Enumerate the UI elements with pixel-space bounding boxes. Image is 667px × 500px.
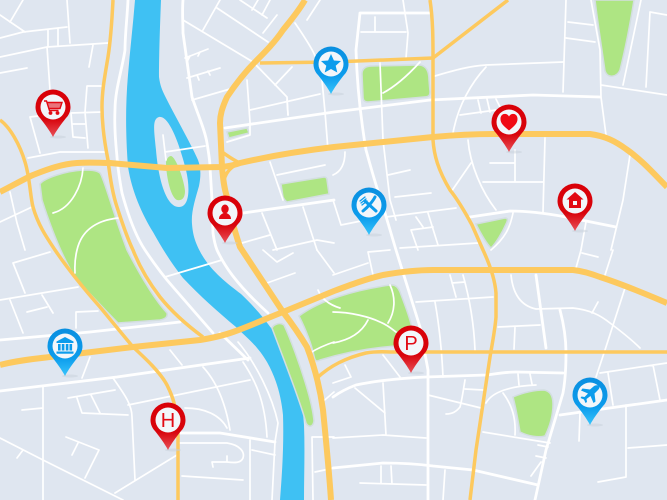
icon: heart <box>500 114 518 130</box>
river <box>126 0 304 500</box>
icon: person <box>219 204 231 219</box>
road: main 1 <box>0 134 667 192</box>
river island <box>154 117 188 207</box>
pin: person <box>208 196 242 244</box>
icon: fork and knife <box>360 197 376 211</box>
pin: hospital <box>150 402 186 452</box>
park: small strip <box>227 128 249 138</box>
road: western arterial <box>102 0 203 337</box>
icon: H: H <box>161 410 175 432</box>
icon: P: P <box>404 333 418 355</box>
road: north link <box>260 58 433 63</box>
road: junction ramps <box>222 152 240 180</box>
icon: plane <box>580 385 600 403</box>
park: triangle <box>476 218 507 248</box>
pin: shopping cart <box>36 90 70 138</box>
park: riverside strip <box>272 324 314 426</box>
pin: airport <box>572 378 608 426</box>
park: top centre <box>362 65 430 102</box>
road: north south arterial <box>220 0 331 500</box>
road: parking east west <box>317 352 667 378</box>
park: central <box>299 285 412 361</box>
pin: bank <box>48 328 82 378</box>
pin: house <box>558 184 592 232</box>
park: west large <box>40 170 167 323</box>
pin: parking <box>394 326 428 374</box>
road: north east diagonal <box>433 0 508 58</box>
road: far west <box>0 120 178 500</box>
road: main 2 <box>0 270 667 365</box>
icon: bank <box>56 337 74 354</box>
pin: star <box>314 46 348 96</box>
icon: star <box>321 54 341 72</box>
island park <box>166 156 185 200</box>
parks <box>40 0 634 437</box>
road: north south centre <box>430 0 496 500</box>
park: top right <box>595 0 634 76</box>
pin: heart <box>492 104 526 154</box>
park: south east <box>513 390 553 437</box>
icon: house <box>566 192 584 208</box>
park: rectangle <box>281 177 329 202</box>
pin: restaurant <box>352 188 386 236</box>
icon: cart <box>44 101 62 114</box>
